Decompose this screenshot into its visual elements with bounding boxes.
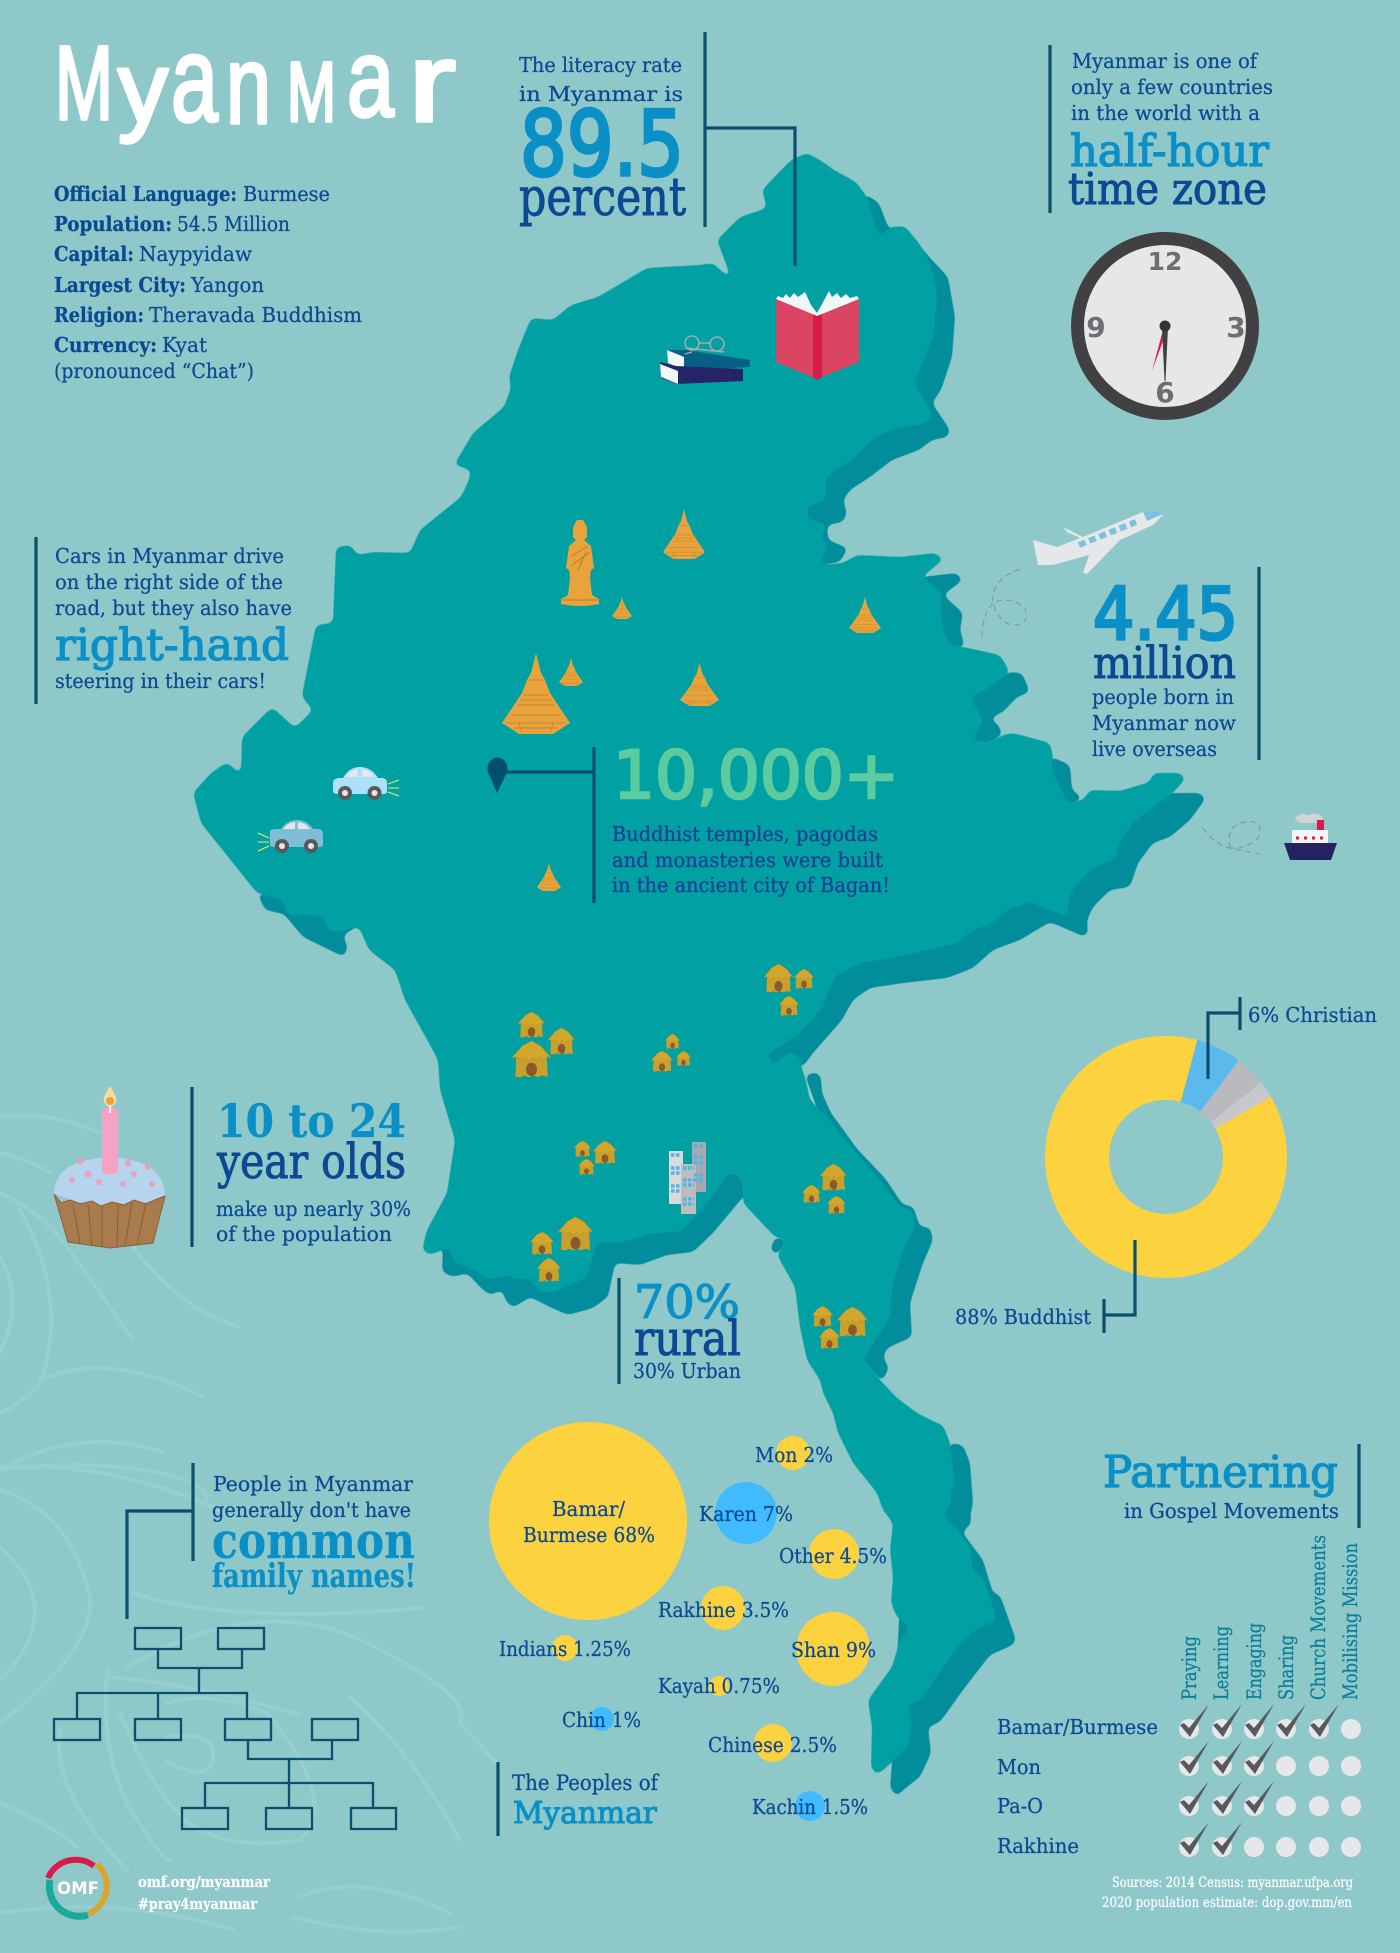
partnership table: Sharing <box>1275 1635 1298 1700</box>
website and hashtag: omf.org/myanmar <box>138 1873 271 1891</box>
callout: 10,000+ temples: in the ancient city of Bagan! <box>612 873 890 897</box>
callout: 10 to 24 year olds <box>192 1087 411 1247</box>
title: M <box>55 25 113 142</box>
callout: common family names: family names! <box>212 1556 416 1595</box>
callout: literacy rate: The literacy rate <box>519 53 682 77</box>
icon: clock: 9 <box>1086 311 1106 344</box>
title <box>55 11 456 147</box>
callout: right-hand steering: on the right side of the <box>55 570 283 594</box>
heading: the peoples of Myanmar: Myanmar <box>513 1796 658 1831</box>
website and hashtag: #pray4myanmar <box>138 1895 258 1913</box>
heading: the peoples of Myanmar: The Peoples of <box>512 1771 660 1795</box>
title: r <box>408 20 456 145</box>
callout: right-hand steering: Cars in Myanmar drive <box>55 544 284 568</box>
bubble chart: peoples of Myanmar: Chin 1% <box>562 1708 641 1732</box>
partnership table: Pa-O <box>997 1794 1043 1818</box>
sources <box>1102 1875 1353 1911</box>
dashed flight path <box>982 569 1026 637</box>
icon: villages of huts <box>512 964 868 1349</box>
country facts: Naypyidaw <box>139 242 252 266</box>
bubble chart: peoples of Myanmar: Bamar/ <box>552 1497 625 1521</box>
bubble chart: peoples of Myanmar: Kachin 1.5% <box>752 1795 868 1819</box>
icon: birthday cupcake <box>54 1086 165 1248</box>
country facts: Population: <box>54 212 172 236</box>
callout: half-hour time zone: only a few countries <box>1071 75 1273 99</box>
title: M <box>287 45 336 139</box>
icon: clock: 6 <box>1155 376 1175 409</box>
family tree diagram <box>54 1628 396 1829</box>
callout: 6% Christian: 6% Christian <box>1248 1003 1377 1027</box>
dashed ship path <box>1203 822 1265 855</box>
bubble chart: peoples of Myanmar <box>489 1422 887 1821</box>
country facts <box>54 182 362 383</box>
title: y <box>118 32 168 144</box>
country facts: Religion: <box>54 303 144 327</box>
callout: 4.45 million overseas: 4.45 <box>1093 572 1238 656</box>
callout: 10 to 24 year olds: 10 to 24 <box>217 1094 406 1148</box>
callout: 10,000+ temples: 10,000+ <box>613 737 899 814</box>
country facts: Burmese <box>243 182 330 206</box>
callout: literacy rate <box>519 32 795 266</box>
title: a <box>347 17 395 140</box>
partnership table: Rakhine <box>997 1834 1079 1858</box>
country facts: Yangon <box>190 273 264 297</box>
callout: 6% Christian <box>1208 997 1377 1079</box>
heading: partnering in gospel movements: in Gospel Movements <box>1124 1499 1339 1523</box>
callout: 4.45 million overseas: Myanmar now <box>1092 711 1236 735</box>
title: n <box>226 24 271 147</box>
callout: common family names: People in Myanmar <box>213 1472 413 1496</box>
website and hashtag <box>138 1873 271 1913</box>
bubble chart: peoples of Myanmar: Rakhine 3.5% <box>658 1598 789 1622</box>
partnership table: Mobilising Mission <box>1339 1543 1362 1700</box>
partnership table: Bamar/Burmese <box>997 1715 1158 1739</box>
country facts: Currency: <box>54 333 157 357</box>
callout: half-hour time zone: time zone <box>1068 164 1267 215</box>
bubble chart: peoples of Myanmar: Chinese 2.5% <box>708 1733 837 1757</box>
callout: right-hand steering: right-hand <box>55 620 289 671</box>
callout: 70% rural: rural <box>634 1311 741 1367</box>
callout: 10 to 24 year olds: of the population <box>216 1222 392 1246</box>
callout: literacy rate: percent <box>519 168 686 228</box>
bubble chart: peoples of Myanmar: Shan 9% <box>791 1638 876 1662</box>
title: a <box>171 11 218 147</box>
callout: 10 to 24 year olds: year olds <box>216 1134 406 1190</box>
icon: dark blue car <box>258 820 323 853</box>
country facts: Largest City: <box>54 273 186 297</box>
bubble chart: peoples of Myanmar: Mon 2% <box>755 1443 833 1467</box>
icon: open red book <box>776 291 859 380</box>
logo: OMF: OMF <box>57 1879 99 1899</box>
partnership table: Praying <box>1178 1636 1201 1700</box>
heading: partnering in gospel movements <box>1103 1444 1359 1528</box>
bubble chart: peoples of Myanmar: Karen 7% <box>699 1502 793 1526</box>
callout: 10,000+ temples: and monasteries were built <box>612 848 884 872</box>
partnership table: Mon <box>997 1755 1041 1779</box>
icon: stacked books with glasses <box>660 336 750 384</box>
callout: 4.45 million overseas: people born in <box>1092 685 1234 709</box>
map of Myanmar <box>193 153 1206 1797</box>
callout: 70% rural <box>619 1275 741 1384</box>
donut chart: religion <box>1045 1036 1287 1278</box>
bubble chart: peoples of Myanmar: Kayah 0.75% <box>658 1674 780 1698</box>
callout: half-hour time zone: half-hour <box>1070 126 1270 177</box>
callout: 70% rural: 30% Urban <box>633 1359 741 1383</box>
callout: common family names <box>127 1463 416 1619</box>
country facts: Official Language: <box>54 182 237 206</box>
callout: 4.45 million overseas: live overseas <box>1092 737 1217 761</box>
callout: 10 to 24 year olds: make up nearly 30% <box>216 1197 411 1221</box>
logo: OMF <box>48 1860 107 1916</box>
background swirl pattern <box>0 1115 500 1932</box>
callout: 10,000+ temples <box>488 737 899 903</box>
callout: literacy rate: 89.5 <box>520 92 684 197</box>
heading: partnering in gospel movements: Partnering <box>1103 1447 1338 1498</box>
partnership table <box>997 1535 1362 1858</box>
callout: 88% Buddhist <box>955 1240 1135 1333</box>
callout: 88% Buddhist: 88% Buddhist <box>955 1305 1092 1329</box>
icon: clock: 12 <box>1148 247 1182 276</box>
icon: clock <box>1078 238 1252 414</box>
country facts: Capital: <box>54 242 134 266</box>
partnership table: Church Movements <box>1307 1535 1330 1700</box>
icon: pagodas and Buddha statue <box>502 509 881 891</box>
callout: half-hour time zone: Myanmar is one of <box>1072 49 1258 73</box>
country facts: Kyat <box>162 333 208 357</box>
icon: city buildings <box>669 1142 706 1214</box>
callout: right-hand steering: steering in their cars! <box>55 669 266 693</box>
icon: ship <box>1284 814 1337 860</box>
country facts: 54.5 Million <box>177 212 290 236</box>
bubble chart: peoples of Myanmar: Burmese 68% <box>523 1523 655 1547</box>
icon: clock: 3 <box>1226 311 1246 344</box>
callout: 10,000+ temples: Buddhist temples, pagodas <box>612 822 878 846</box>
icon: airplane <box>1033 511 1163 574</box>
icon: light blue car <box>333 767 399 800</box>
country facts: Theravada Buddhism <box>149 303 362 327</box>
partnership table: Learning <box>1210 1626 1233 1700</box>
callout: right-hand steering: road, but they also have <box>55 596 292 620</box>
callout: common family names: generally don't have <box>212 1498 411 1522</box>
callout: literacy rate: in Myanmar is <box>519 82 683 106</box>
callout: half-hour time zone: in the world with a <box>1071 101 1260 125</box>
callout: 70% rural: 70% <box>634 1275 740 1329</box>
callout: half-hour time zone <box>1050 45 1273 215</box>
partnership table: Engaging <box>1243 1623 1266 1700</box>
callout: 4.45 million overseas: million <box>1093 638 1236 689</box>
callout: right-hand steering <box>36 537 292 704</box>
bubble chart: peoples of Myanmar: Other 4.5% <box>779 1544 887 1568</box>
callout: common family names: common <box>212 1511 415 1570</box>
sources: Sources: 2014 Census: myanmar.ufpa.org <box>1112 1875 1353 1891</box>
callout: 4.45 million overseas <box>1092 567 1259 761</box>
sources: 2020 population estimate: dop.gov.mm/en <box>1102 1895 1352 1911</box>
heading: the peoples of Myanmar <box>498 1762 660 1836</box>
country facts: (pronounced “Chat”) <box>54 359 254 383</box>
bubble chart: peoples of Myanmar: Indians 1.25% <box>499 1637 631 1661</box>
